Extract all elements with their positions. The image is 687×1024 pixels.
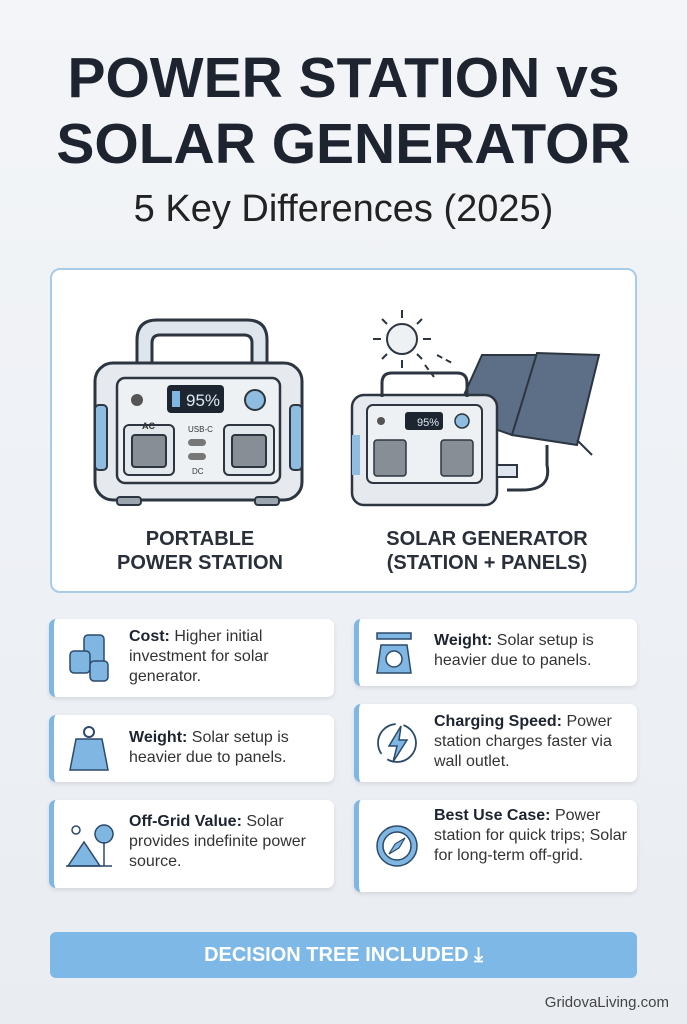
card: weight right: [354, 619, 637, 686]
card: off-grid: Off-Grid Value: Solar provides indefinite power source.: [129, 813, 306, 870]
illustration: portable power station: DC: [192, 467, 204, 476]
card: weight right: Weight: Solar setup is heavier due to panels.: [434, 632, 594, 669]
label: portable power station: POWER STATION: [117, 552, 283, 574]
icon: lightning cycle: [377, 723, 417, 763]
card: charging speed: Charging Speed: Power station charges faster via wall outlet.: [434, 713, 612, 770]
label: portable power station: [117, 528, 283, 574]
button: decision tree: DECISION TREE INCLUDED ⤓: [204, 944, 483, 966]
illustration: solar generator: [350, 310, 600, 506]
title: [56, 46, 631, 176]
button: decision tree: [50, 932, 637, 978]
icon: compass: [376, 825, 418, 867]
card: best use case: [354, 800, 637, 892]
illustration: portable power station: [94, 318, 304, 506]
subtitle: 5 Key Differences (2025): [134, 188, 553, 230]
card: weight left: Weight: Solar setup is heavier due to panels.: [129, 729, 289, 766]
icon: coins: [69, 634, 109, 682]
illustration: solar generator: 95%: [417, 417, 439, 429]
card: cost: Cost: Higher initial investment for solar generator.: [129, 628, 269, 685]
icon: scale: [376, 632, 412, 674]
card: cost: [49, 619, 334, 697]
label: portable power station: PORTABLE: [146, 528, 254, 550]
label: solar generator: [386, 528, 588, 574]
illustration: portable power station: 95%: [186, 391, 220, 410]
card: weight left: [49, 715, 334, 782]
title: SOLAR GENERATOR: [56, 112, 631, 176]
footer: site: GridovaLiving.com: [545, 994, 669, 1011]
illustration: portable power station: USB-C: [188, 425, 213, 434]
label: solar generator: (STATION + PANELS): [387, 552, 587, 574]
card: best use case: Best Use Case: Power station for quick trips; Solar for long-term off-grid.: [434, 807, 627, 864]
card: off-grid: [49, 800, 334, 888]
icon: tent: [66, 824, 114, 867]
panel: products: [50, 268, 637, 593]
card: charging speed: [354, 704, 637, 782]
label: solar generator: SOLAR GENERATOR: [386, 528, 588, 550]
icon: weight: [69, 726, 109, 771]
title: POWER STATION vs: [67, 46, 620, 110]
illustration: portable power station: AC: [142, 421, 155, 431]
